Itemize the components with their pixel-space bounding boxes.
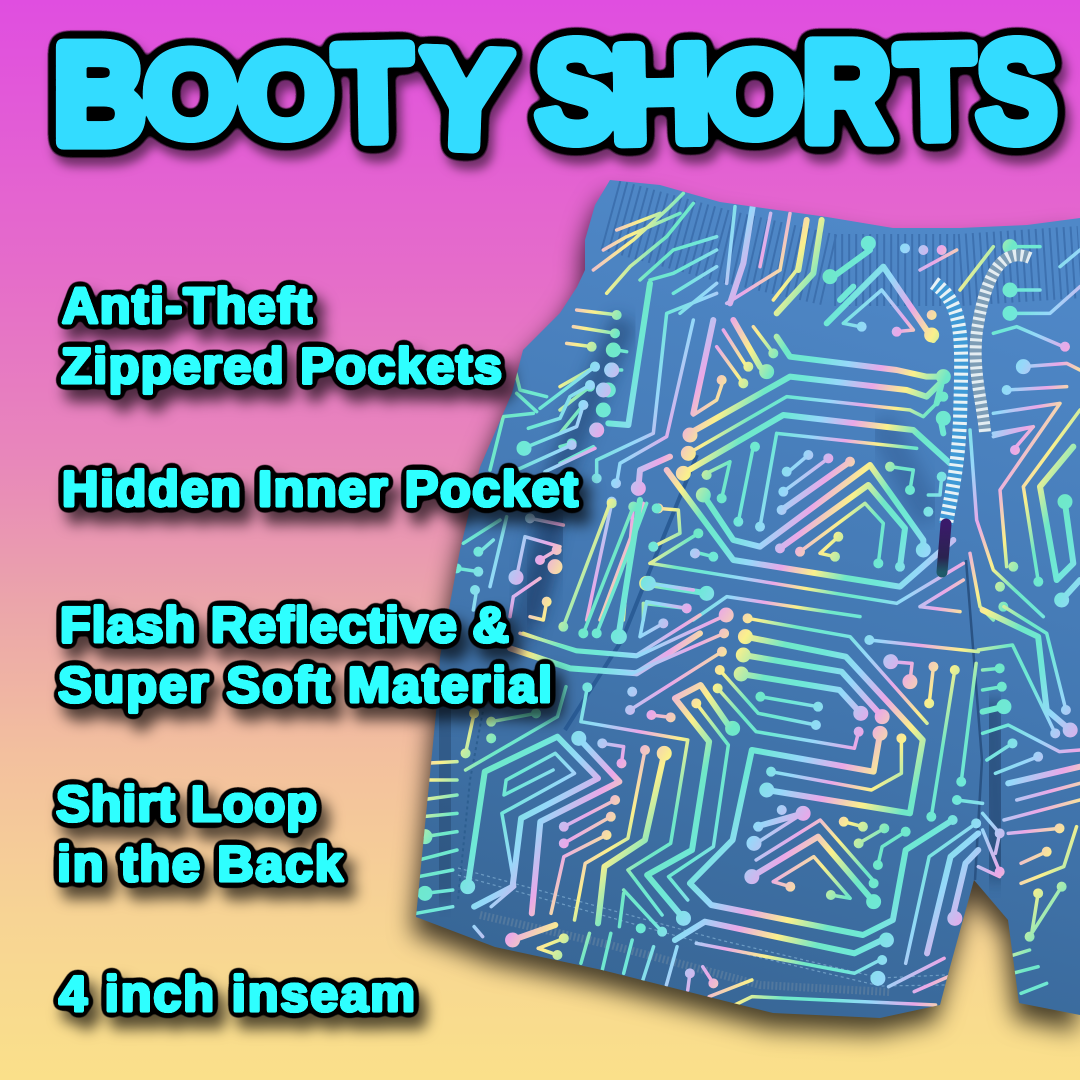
circuit traces: upper panel <box>560 193 1080 620</box>
title: BOOTY SHORTS: T <box>333 16 412 169</box>
title: BOOTY SHORTS: R <box>802 13 891 170</box>
title: BOOTY SHORTS: S <box>536 12 616 170</box>
feature: anti-theft zippered pockets <box>61 277 502 394</box>
title: BOOTY SHORTS: T <box>895 18 975 167</box>
feature: shirt loop in the back: in the Back <box>57 835 344 892</box>
title: BOOTY SHORTS <box>54 12 1056 178</box>
title: BOOTY SHORTS: H <box>609 18 711 172</box>
title: BOOTY SHORTS: O <box>144 27 237 162</box>
title: BOOTY SHORTS: O <box>238 27 334 162</box>
feature: anti-theft zippered pockets: Zippered Pockets <box>61 337 502 394</box>
feature list <box>56 277 578 1022</box>
shorts silhouette with drop shadow <box>416 180 1080 1018</box>
feature: shirt loop in the back <box>56 775 344 892</box>
feature: flash reflective and super soft material: Super Soft Material <box>58 656 552 713</box>
title: BOOTY SHORTS: O <box>707 27 803 162</box>
feature: shirt loop in the back: Shirt Loop <box>56 775 317 832</box>
title: BOOTY SHORTS: S <box>977 12 1056 170</box>
fabric folds and shading <box>440 215 1080 900</box>
feature: flash reflective and super soft material: Flash Reflective & <box>60 596 509 653</box>
title: BOOTY SHORTS: Y <box>418 21 514 178</box>
circuit traces: lower panel <box>416 607 1080 1005</box>
title: BOOTY SHORTS: B <box>54 14 145 174</box>
circuit traces: left pocket <box>457 367 700 673</box>
clipped fabric details <box>416 193 1080 1005</box>
seams and stitching <box>458 455 982 992</box>
drawstring cords <box>934 255 1030 572</box>
feature: anti-theft zippered pockets: Anti-Theft <box>62 277 312 334</box>
feature: hidden inner pocket: Hidden Inner Pocket <box>62 460 578 517</box>
product photo: reflective circuit-print shorts <box>416 180 1080 1018</box>
feature: 4 inch inseam: 4 inch inseam <box>59 965 415 1022</box>
feature: flash reflective and super soft material <box>58 596 552 713</box>
